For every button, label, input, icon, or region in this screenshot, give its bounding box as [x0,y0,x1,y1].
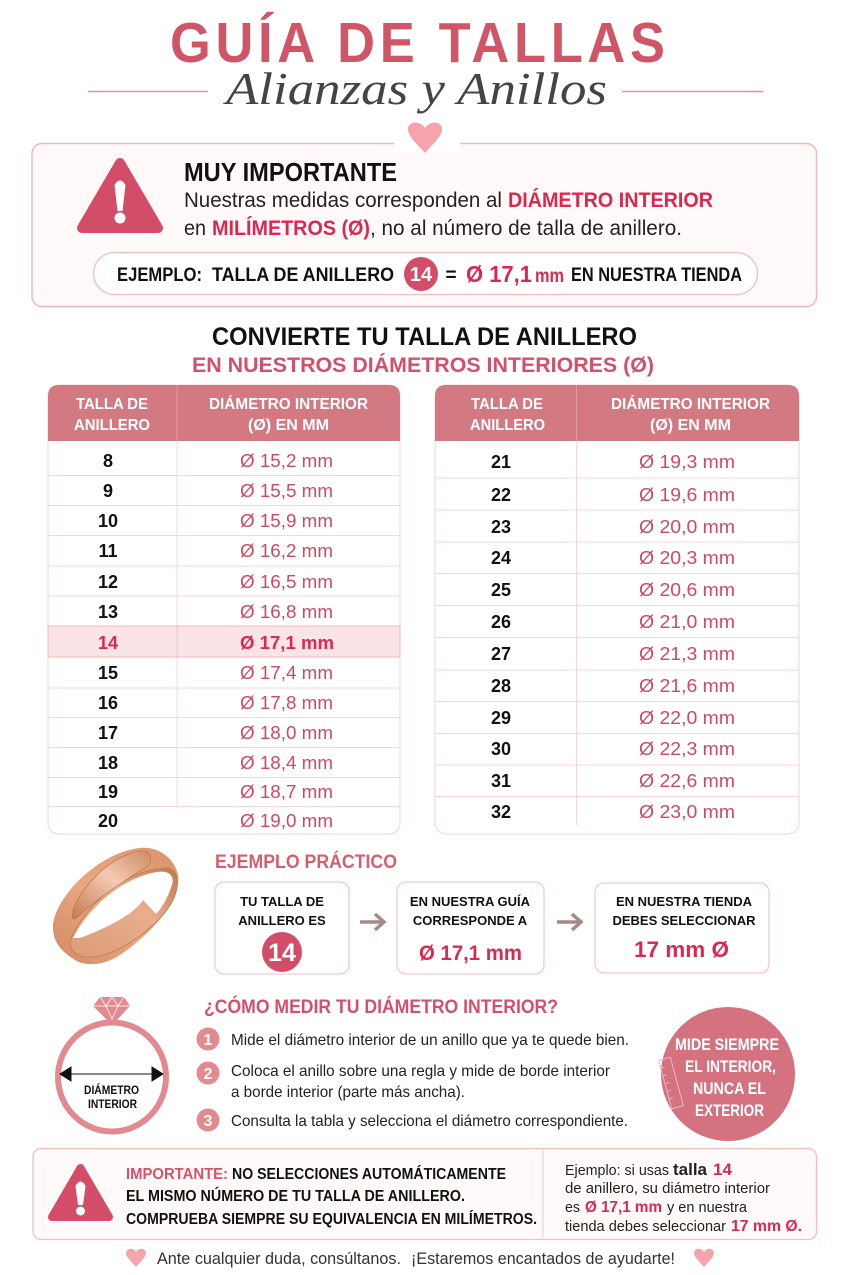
panel: muy importante [32,122,816,306]
arrow [557,914,581,930]
arrow: diameter [60,1067,163,1081]
heading: muy importante: MUY IMPORTANTE [184,157,397,187]
card: nuestra guía: EN NUESTRA GUÍA [410,894,531,909]
step 2: a borde interior (parte más ancha). [231,1084,465,1101]
row 32: Ø 23,0 mm [639,802,735,822]
table: left [48,385,400,834]
row 17: Ø 18,0 mm [240,723,333,743]
row 26: 26 [491,612,511,632]
row 25: 25 [491,580,511,600]
row 29: 29 [491,708,511,728]
callout: mide siempre: EXTERIOR [695,1102,764,1120]
label: diámetro interior: INTERIOR [88,1099,138,1111]
callout: mide siempre: NUNCA EL [693,1080,766,1098]
row 30: Ø 22,3 mm [639,739,735,759]
row 9: Ø 15,5 mm [240,481,333,501]
row 9 [103,481,333,501]
text block: explanation: MILÍMETROS (Ø) [212,217,370,240]
arrow [360,914,384,930]
card: nuestra guía [397,882,544,974]
row 25 [491,580,735,600]
row 20: Ø 19,0 mm [240,811,333,831]
text block: ejemplo: Ejemplo: si usas [565,1162,669,1179]
card: nuestra tienda: EN NUESTRA TIENDA [616,894,753,909]
row 15 [98,663,333,683]
icon: diamond [93,997,130,1024]
row 27: Ø 21,3 mm [639,644,735,664]
heading: cómo medir: ¿CÓMO MEDIR TU DIÁMETRO INTERIOR? [204,996,558,1018]
footer text: Ante cualquier duda, consúltanos. [157,1249,401,1268]
table header [435,385,799,441]
row 27 [491,644,735,664]
step 1 [196,1028,629,1050]
row 17 [98,723,333,743]
row 28 [491,676,735,696]
text block: ejemplo: 17 mm Ø. [731,1218,802,1235]
row 22 [491,485,735,505]
label: diámetro interior: DIÁMETRO [84,1084,139,1097]
row 25: Ø 20,6 mm [639,580,735,600]
row 28: Ø 21,6 mm [639,676,735,696]
row 18: 18 [98,753,118,773]
text block: ejemplo: Ø 17,1 mm [585,1199,662,1216]
row 11 [98,541,333,561]
row 23: Ø 20,0 mm [639,517,735,537]
example pill: = [445,265,457,286]
table: right [435,385,799,834]
card: tu talla: 14 [268,939,296,967]
icon: heart [126,1249,146,1267]
row 12 [98,572,333,592]
row 26 [491,612,735,632]
row 8: 8 [103,451,113,471]
icon: gold ring [53,848,178,964]
row 30 [491,739,735,759]
row 19: 19 [98,782,118,802]
step 2: Coloca el anillo sobre una regla y mide de borde interior [231,1063,611,1080]
row 22: 22 [491,485,511,505]
row 13: 13 [98,602,118,622]
card: nuestra guía: Ø 17,1 mm [419,942,522,965]
text block: explanation [184,189,713,240]
row 24: Ø 20,3 mm [639,548,735,568]
row 18: Ø 18,4 mm [240,753,333,773]
card: tu talla: TU TALLA DE [240,894,324,909]
icon: heart [408,122,442,153]
row 20: 20 [98,811,118,831]
row 24: 24 [491,548,511,568]
step 3: 3 [204,1113,213,1130]
table header: DIÁMETRO INTERIOR [611,396,770,413]
row 13: Ø 16,8 mm [240,602,333,622]
step 3: Consulta la tabla y selecciona el diámetro correspondiente. [231,1113,628,1130]
row 16 [98,693,333,713]
row 30: 30 [491,739,511,759]
heading: ejemplo práctico: EJEMPLO PRÁCTICO [215,851,397,873]
text block: ejemplo: tienda debes seleccionar [565,1218,726,1235]
row 14 highlighted: Ø 17,1 mm [240,633,334,653]
row 32: 32 [491,802,511,822]
row 23 [491,517,735,537]
table header: ANILLERO [470,417,545,434]
row 9: 9 [103,481,113,501]
text block: ejemplo: talla [673,1160,708,1179]
text block: explanation: DIÁMETRO INTERIOR [508,189,713,212]
row 19: Ø 18,7 mm [240,782,333,802]
row 11: 11 [98,541,118,561]
row 10 [98,511,333,531]
row 23: 23 [491,517,511,537]
title: GUÍA DE TALLAS [170,10,665,74]
row 8: Ø 15,2 mm [240,451,333,471]
row 10: Ø 15,9 mm [240,511,333,531]
example pill: TALLA DE ANILLERO [212,264,394,286]
label: diámetro interior [84,1084,139,1111]
row 29 [491,708,735,728]
text block: explanation: , no al número de talla de anillero. [370,217,682,240]
text block: ejemplo: y en nuestra [667,1199,748,1216]
row 29: Ø 22,0 mm [639,708,735,728]
example pill: 14 [410,264,433,286]
text block: ejemplo: es [565,1199,580,1216]
card: nuestra guía: CORRESPONDE A [413,913,528,928]
row 8 [103,451,333,471]
step 2: 2 [204,1066,213,1083]
text block: explanation: en [184,217,206,240]
row 19 [98,782,333,802]
icon: heart [694,1249,714,1267]
step 1: Mide el diámetro interior de un anillo que ya te quede bien. [231,1032,629,1049]
step 2 [196,1062,611,1101]
row 28: 28 [491,676,511,696]
row 12: 12 [98,572,118,592]
row 32 [491,802,735,822]
row 11: Ø 16,2 mm [240,541,333,561]
text block: ejemplo: 14 [713,1160,733,1179]
text block: explanation: Nuestras medidas corresponden al [184,189,502,212]
callout: mide siempre [659,1007,795,1141]
row 13 [98,602,333,622]
table header: TALLA DE [76,396,148,413]
table header: DIÁMETRO INTERIOR [209,396,368,413]
heading: convierte: CONVIERTE TU TALLA DE ANILLERO [212,323,637,351]
row 21: 21 [491,452,511,472]
card: tu talla: ANILLERO ES [238,913,326,928]
callout: mide siempre: MIDE SIEMPRE [675,1036,779,1054]
step 3 [196,1108,628,1132]
row 14 highlighted [48,626,400,657]
table header: TALLA DE [471,396,543,413]
row 10: 10 [98,511,118,531]
diagram: ring diameter [58,997,166,1132]
row 20 [98,811,333,831]
table header [48,385,400,441]
table header: ANILLERO [74,417,150,434]
icon: warning triangle [82,163,158,228]
text block: warning [126,1164,537,1228]
example pill: mm [535,266,564,287]
row 15: 15 [98,663,118,683]
example pill: Ø 17,1 [466,261,532,287]
footer text [157,1249,675,1268]
row 14 highlighted: 14 [98,633,118,653]
text block: ejemplo: de anillero, su diámetro interior [565,1180,770,1197]
row 31 [491,771,735,791]
row 12: Ø 16,5 mm [240,572,333,592]
card: nuestra tienda [595,883,769,973]
row 18 [98,753,333,773]
text block: warning: NO SELECCIONES AUTOMÁTICAMENTE [232,1164,506,1183]
text block: warning: EL MISMO NÚMERO DE TU TALLA DE ANILLERO. [126,1186,465,1205]
footer text: ¡Estaremos encantados de ayudarte! [411,1249,675,1268]
icon: ruler [659,1057,683,1109]
row 22: Ø 19,6 mm [639,485,735,505]
row 27: 27 [491,644,511,664]
example pill [94,252,758,294]
row 21: Ø 19,3 mm [639,452,735,472]
row 21 [491,452,735,472]
subheading: diámetros: EN NUESTROS DIÁMETROS INTERIORES (Ø) [192,354,654,377]
text block: ejemplo [565,1160,802,1235]
row 31: 31 [491,771,511,791]
text block: warning: IMPORTANTE: [126,1166,228,1183]
icon: warning triangle [52,1168,109,1217]
text block: warning: COMPRUEBA SIEMPRE SU EQUIVALENCIA EN MILÍMETROS. [126,1209,537,1228]
row 16: 16 [98,693,118,713]
step 1: 1 [204,1032,213,1049]
row 15: Ø 17,4 mm [240,663,333,683]
subtitle: Alianzas y Anillos [222,64,607,114]
card: nuestra tienda: DEBES SELECCIONAR [612,913,756,928]
row 31: Ø 22,6 mm [639,771,735,791]
row 24 [491,548,735,568]
card: nuestra tienda: 17 mm Ø [634,937,729,962]
card: tu talla [215,882,349,974]
row 17: 17 [98,723,118,743]
row 16: Ø 17,8 mm [240,693,333,713]
table header: (Ø) EN MM [248,417,329,434]
example pill: EN NUESTRA TIENDA [571,264,742,286]
panel: importante [33,1148,816,1240]
row 26: Ø 21,0 mm [639,612,735,632]
callout: mide siempre: EL INTERIOR, [685,1058,776,1076]
table header: (Ø) EN MM [650,417,731,434]
example pill: EJEMPLO: [117,264,202,286]
